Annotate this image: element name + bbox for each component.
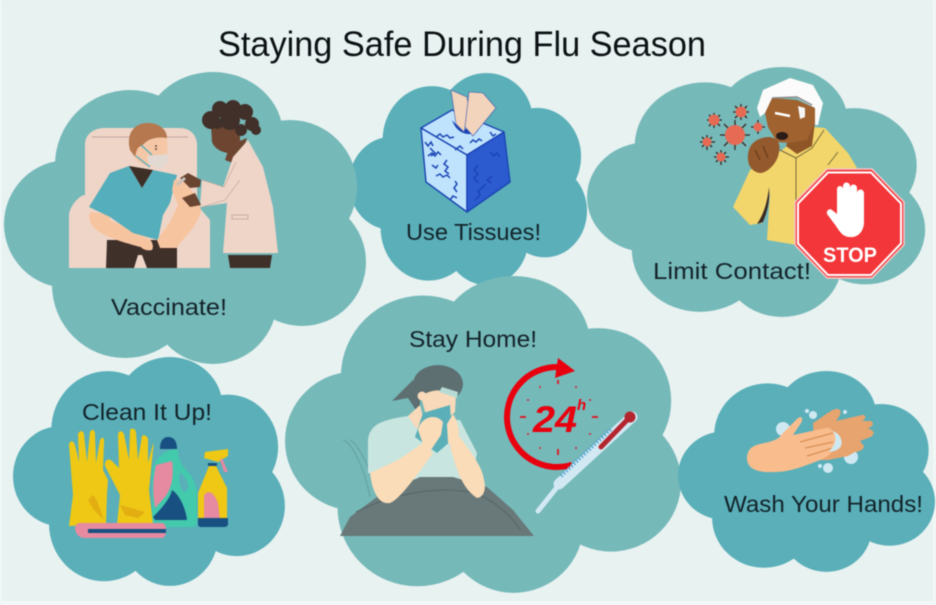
icon: tissue box	[421, 90, 510, 212]
cloud background: clean it up	[13, 357, 285, 586]
icon: 24 hour clock	[507, 358, 598, 467]
illustration: cleaning supplies	[69, 429, 228, 538]
panel: stay home	[285, 276, 681, 593]
panel: clean it up	[13, 357, 285, 586]
cloud background: stay home	[285, 276, 681, 593]
icon: stop sign	[795, 169, 904, 278]
icon: thermometer	[538, 412, 636, 511]
title: Staying Safe During Flu Season	[218, 25, 706, 64]
panel: use tissues	[349, 73, 587, 285]
cloud background: tissues	[349, 73, 587, 285]
panel: wash your hands	[678, 371, 935, 572]
cloud background: vaccinate	[4, 72, 366, 364]
stop sign text: STOP	[823, 244, 877, 267]
illustration: washing hands	[747, 409, 874, 473]
clock text: 24	[532, 399, 577, 440]
patient in chair	[69, 123, 210, 268]
icon: 24 hour clock: h	[577, 397, 586, 414]
label: use tissues: Use Tissues!	[406, 219, 541, 245]
label: vaccinate: Vaccinate!	[111, 294, 227, 320]
nurse	[177, 100, 278, 268]
icon: virus particles	[700, 104, 765, 165]
cloud background: wash your hands	[678, 371, 935, 572]
label: stay home: Stay Home!	[409, 326, 537, 352]
label: clean it up: Clean It Up!	[82, 399, 212, 425]
illustration: sick woman in bed	[340, 365, 534, 536]
label: limit contact: Limit Contact!	[653, 258, 811, 284]
illustration: coughing man	[733, 78, 880, 245]
label: wash your hands: Wash Your Hands!	[724, 491, 923, 517]
panel: limit contact	[587, 67, 925, 317]
cloud background: limit contact	[587, 67, 925, 317]
illustration: patient receiving vaccine	[69, 100, 278, 268]
panel: vaccinate	[4, 72, 366, 364]
